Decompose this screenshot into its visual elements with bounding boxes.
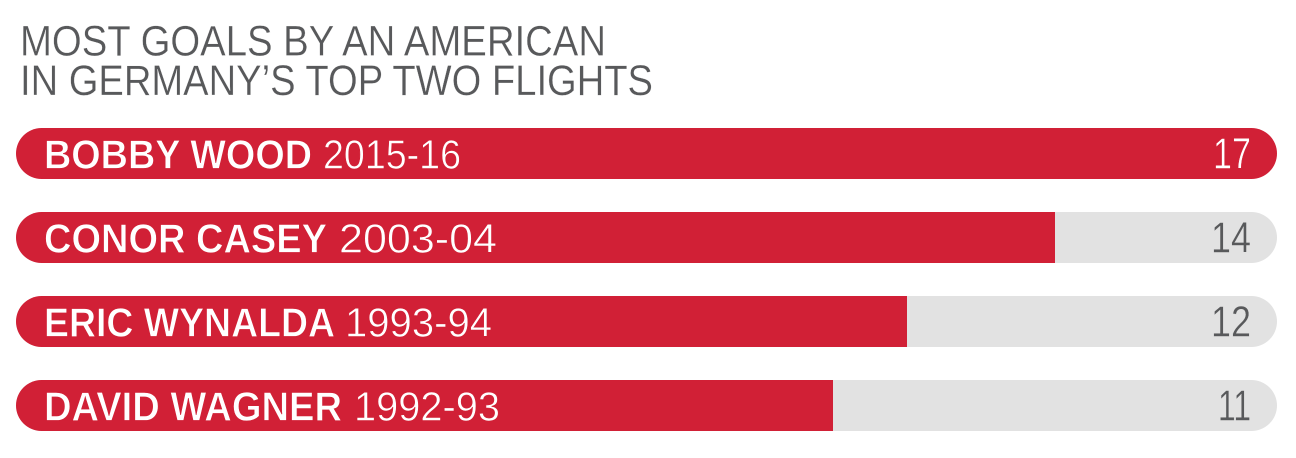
grey track: [16, 212, 1277, 263]
label: Bobby Wood 2015-16: [44, 132, 461, 178]
label: Conor Casey 2003-04: CONOR CASEY: [44, 216, 327, 262]
value: 11: 11: [1218, 382, 1251, 430]
red bar: 17 goals: [16, 128, 1277, 179]
red bar: 14 goals: [16, 212, 1055, 263]
value: 12: 12: [1211, 298, 1251, 346]
label: Bobby Wood 2015-16: BOBBY WOOD: [44, 132, 312, 178]
value: 17: 17: [1213, 130, 1251, 178]
bar row: David Wagner 11: [16, 380, 1277, 431]
value: 14: 14: [1211, 214, 1251, 262]
label: David Wagner 1992-93: 1992-93: [354, 384, 500, 430]
title: [20, 18, 653, 105]
title: MOST GOALS BY AN AMERICAN: [20, 18, 606, 66]
label: Conor Casey 2003-04: 2003-04: [339, 216, 497, 262]
bar row: Conor Casey 14: [16, 212, 1277, 263]
red bar: 11 goals: [16, 380, 833, 431]
title: IN GERMANY’S TOP TWO FLIGHTS: [20, 58, 653, 105]
label: Eric Wynalda 1993-94: ERIC WYNALDA: [44, 300, 335, 346]
bar row: Eric Wynalda 12: [16, 296, 1277, 347]
bar row: Bobby Wood 17: [16, 128, 1277, 179]
grey track: [16, 380, 1277, 431]
label: Bobby Wood 2015-16: 2015-16: [323, 132, 461, 178]
label: Eric Wynalda 1993-94: 1993-94: [345, 300, 492, 346]
grey track: [16, 296, 1277, 347]
label: David Wagner 1992-93: DAVID WAGNER: [44, 384, 342, 430]
red bar: 12 goals: [16, 296, 907, 347]
label: Conor Casey 2003-04: [44, 216, 497, 262]
